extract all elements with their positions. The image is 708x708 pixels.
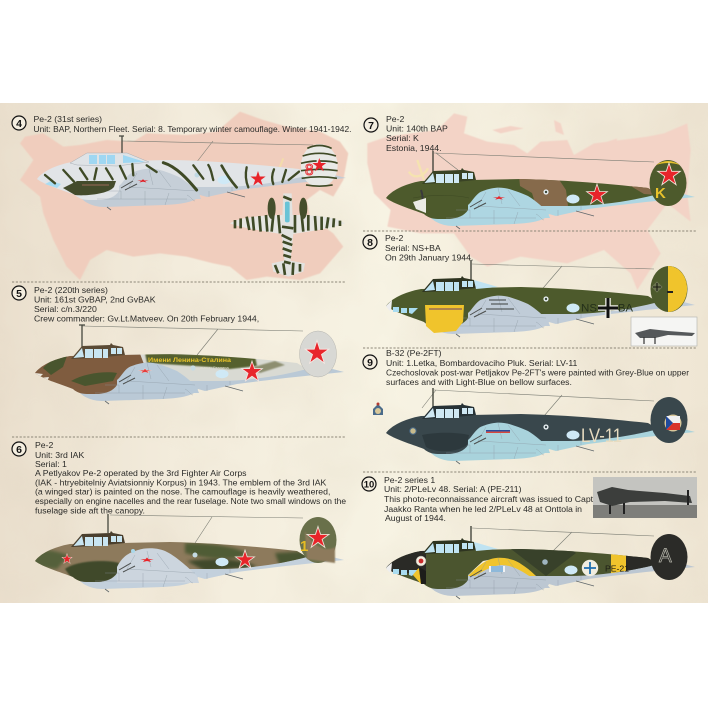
caption 8 [385,233,473,262]
panel: aircraft 8 [363,233,697,346]
panel: aircraft 5 [12,285,344,404]
map: left red USSR silhouette [20,112,348,280]
caption 8: Pe-2 [385,233,404,243]
badge 9 [363,355,377,369]
caption 7: Unit: 140th BAP [386,124,448,134]
caption 7 [386,114,448,153]
profile 10: PE-21 [605,564,630,574]
caption 4: Pe-2 (31st series) [34,114,102,124]
badge 7: 7 [368,120,374,132]
profile 6: 1 [300,538,308,555]
profile 5: имени Сталина [200,365,229,370]
caption 6: (IAK - htryebitelniy Aviatsionniy Korpus) in 1943. The emblem of the 3rd IAK [35,478,327,488]
caption 10: Jaakko Ranta when he led 2/PLeLv 48 at Onttola in [384,504,582,514]
badge 9: 9 [367,357,373,369]
caption 8: On 29th January 1944. [385,252,473,262]
caption 5 [34,285,259,324]
caption 7: Estonia, 1944. [386,143,442,153]
profile 8: NS [581,302,597,314]
map: right red USSR silhouette [367,113,691,290]
caption 5: Unit: 161st GvBAP, 2nd GvBAK [34,294,156,304]
top view 4 [230,193,345,277]
caption 6 [35,440,346,516]
badge 6: 6 [16,444,22,456]
badge 10 [362,477,376,491]
caption 5: Serial: c/n.3/220 [34,304,97,314]
badge 8 [363,235,377,249]
fin and star 4 [301,144,338,187]
profile 9: LV-11 [581,426,622,447]
caption 9: B-32 (Pe-2FT) [386,348,442,358]
panel: aircraft 10 [362,475,697,599]
panel: aircraft 7 [364,114,695,229]
badge 8: 8 [367,237,373,249]
badge 5 [12,286,26,300]
caption 9: surfaces and with Light-Blue on bellow surfaces. [386,377,572,387]
profile 8 [386,260,695,337]
profile 10: A [659,546,672,567]
caption 7: Pe-2 [386,114,405,124]
caption 6: Pe-2 [35,440,54,450]
caption 10: August of 1944. [385,513,446,523]
caption 6: especially on engine nacelles and the rear fuselage. Note two small windows on the [35,496,346,506]
caption 9: Czechoslovak post-war Petljakov Pe-2FT's were painted with Grey-Blue on upper [386,368,689,378]
profile 5 [33,325,344,404]
profile 4 [37,136,346,210]
caption 6: Serial: 1 [35,459,67,469]
panel: aircraft 6 [12,440,346,592]
tail marking 8 [651,281,663,293]
profile 9 [386,388,695,464]
badge 5: 5 [16,288,22,300]
caption 10 [384,475,596,523]
profile 7 [386,151,695,229]
caption 7: Serial: K [386,133,419,143]
panel: aircraft 9 [363,348,695,464]
caption 8: Serial: NS+BA [385,243,441,253]
caption 9 [386,348,689,387]
profile 7: K [655,185,666,202]
caption 4: Unit: BAP, Northern Fleet. Serial: 8. Temporary winter camouflage. Winter 1941-1942. [34,124,352,134]
caption 10: This photo-reconnaissance aircraft was issued to Capt. [384,494,596,504]
caption 6: (a winged star) is painted on the nose. The camouflage is heavily weathered, [35,486,330,496]
dashed dividers [12,231,697,472]
caption 9: Unit: 1.Letka, Bombardovaciho Pluk. Serial: LV-11 [386,358,578,368]
badge 4 [12,116,26,130]
badge 10: 10 [364,480,374,490]
caption 10: Pe-2 series 1 [384,475,435,485]
badge 4: 4 [16,118,22,130]
profile 8: BA [618,302,634,314]
profile 10 [384,526,695,599]
caption 10: Unit: 2/PLeLv 48. Serial: A (PE-211) [384,484,522,494]
photo 10 [593,477,697,518]
profile 5: Имени Ленина-Сталина [148,358,232,364]
caption 6: A Petlyakov Pe-2 operated by the 3rd Fighter Air Corps [35,468,247,478]
caption 6: Unit: 3rd IAK [35,450,84,460]
badge 7 [364,118,378,132]
caption 5: Pe-2 (220th series) [34,285,108,295]
caption 6: fuselage side aft the canopy. [35,506,145,516]
star on fuselage 4 [250,171,266,185]
caption 5: Crew commander: Gv.Lt.Matveev. On 20th February 1944, [34,314,259,324]
badge 6 [12,442,26,456]
paper panel [0,103,708,603]
panel: aircraft 4 [12,114,352,277]
fin and star 4: 8 [305,162,314,179]
camouflage stripes 4 [45,163,299,190]
squadron emblem 9 [373,402,383,415]
photo 8 [631,317,697,346]
caption 4 [34,114,352,134]
profile 6 [33,514,344,592]
